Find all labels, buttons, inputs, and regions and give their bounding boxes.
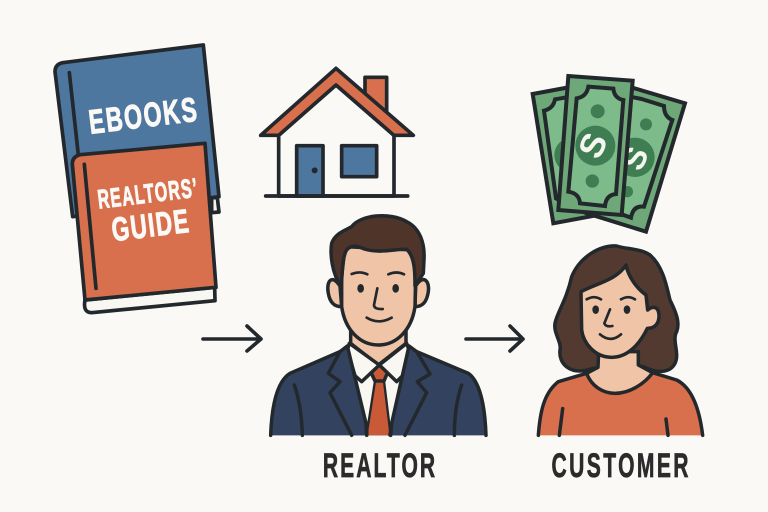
door	[297, 146, 323, 196]
figure: customer	[538, 246, 703, 435]
facial features	[587, 297, 635, 339]
walls	[279, 85, 394, 196]
jacket	[271, 352, 486, 435]
arrow: books to realtor	[203, 326, 261, 351]
label: customer: CUSTOMER	[551, 446, 689, 484]
hair	[555, 246, 678, 371]
neck	[351, 327, 406, 365]
icon: red realtors' guide book: REALTORS’	[96, 172, 199, 215]
sleeve lines	[559, 409, 668, 435]
neck	[587, 352, 653, 393]
icon: fanned dollar bills	[533, 76, 685, 232]
middle bill	[558, 76, 633, 215]
icon: blue ebooks book	[55, 45, 219, 217]
figure: realtor	[271, 216, 486, 435]
tie	[367, 365, 390, 435]
lapels	[328, 346, 430, 435]
books: ebooks and realtors' guide	[55, 45, 219, 313]
roof	[261, 68, 413, 135]
shirt	[538, 373, 703, 435]
facial features	[352, 272, 404, 321]
icon: house	[261, 68, 413, 196]
middle bill: S	[572, 127, 616, 164]
icon: blue ebooks book: EBOOKS	[87, 92, 199, 142]
ground line	[266, 190, 408, 201]
shirt	[355, 365, 404, 423]
icon: red realtors' guide book	[72, 143, 216, 313]
left bill	[533, 84, 607, 223]
right bill: S	[614, 141, 656, 176]
face and ear	[581, 265, 659, 357]
window	[342, 146, 377, 177]
arrow: realtor to customer	[466, 326, 523, 351]
face	[342, 247, 416, 345]
right bill	[587, 84, 685, 232]
collar	[347, 343, 409, 382]
label: realtor: REALTOR	[323, 446, 435, 484]
sleeve lines	[294, 385, 462, 435]
icon: red realtors' guide book: GUIDE	[109, 203, 191, 249]
hair	[331, 216, 424, 286]
chimney	[365, 77, 387, 113]
ears	[328, 280, 429, 307]
